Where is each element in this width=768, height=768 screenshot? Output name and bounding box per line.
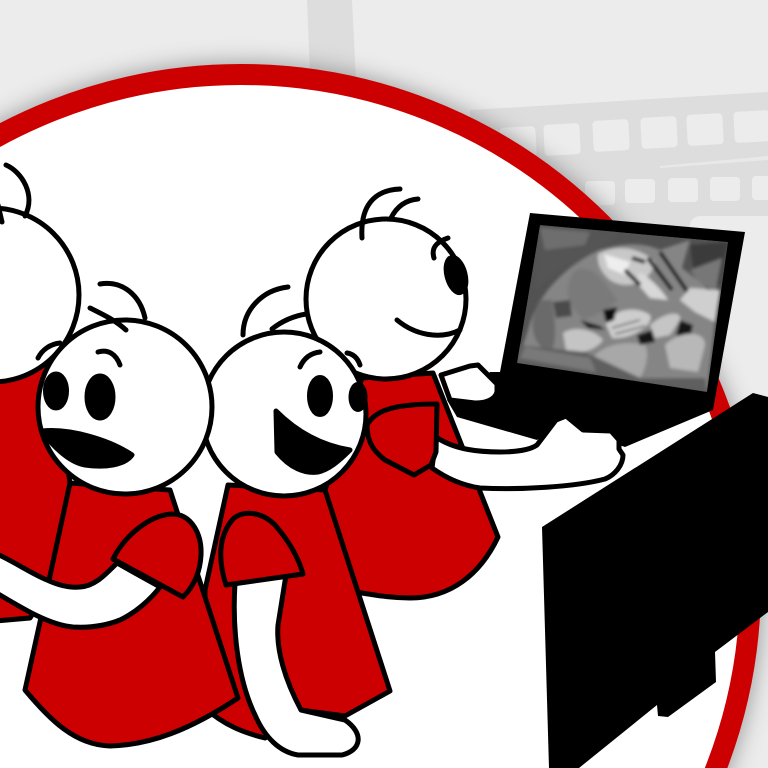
arm <box>0 553 160 627</box>
person: back figure arms <box>367 365 623 489</box>
laptop <box>447 213 745 447</box>
arm <box>234 575 358 755</box>
sleeve <box>113 514 201 597</box>
curl behind head <box>38 343 60 358</box>
eyebrow <box>433 238 448 258</box>
sleeve <box>367 404 437 475</box>
eyebrows <box>300 352 360 367</box>
eyebrow <box>98 351 120 365</box>
mouth <box>42 431 132 466</box>
near hand on laptop <box>441 365 497 403</box>
eye <box>443 255 469 295</box>
person: front left figure <box>0 283 238 746</box>
sleeve <box>221 513 303 585</box>
eyes <box>310 378 330 414</box>
hair <box>362 189 418 238</box>
tiger photo on screen <box>517 225 728 392</box>
person: back figure body <box>306 189 498 598</box>
hair <box>90 283 145 330</box>
mouth <box>276 411 350 472</box>
background: film strip <box>307 0 768 246</box>
smile <box>397 320 460 335</box>
person: left figure cropped <box>0 165 79 621</box>
eyes <box>46 374 66 408</box>
hair <box>0 165 29 222</box>
forearm and pointing hand <box>432 416 623 489</box>
foreground computer monitor <box>542 393 768 768</box>
hair behind head <box>243 287 306 335</box>
person: centre figure <box>202 287 390 755</box>
